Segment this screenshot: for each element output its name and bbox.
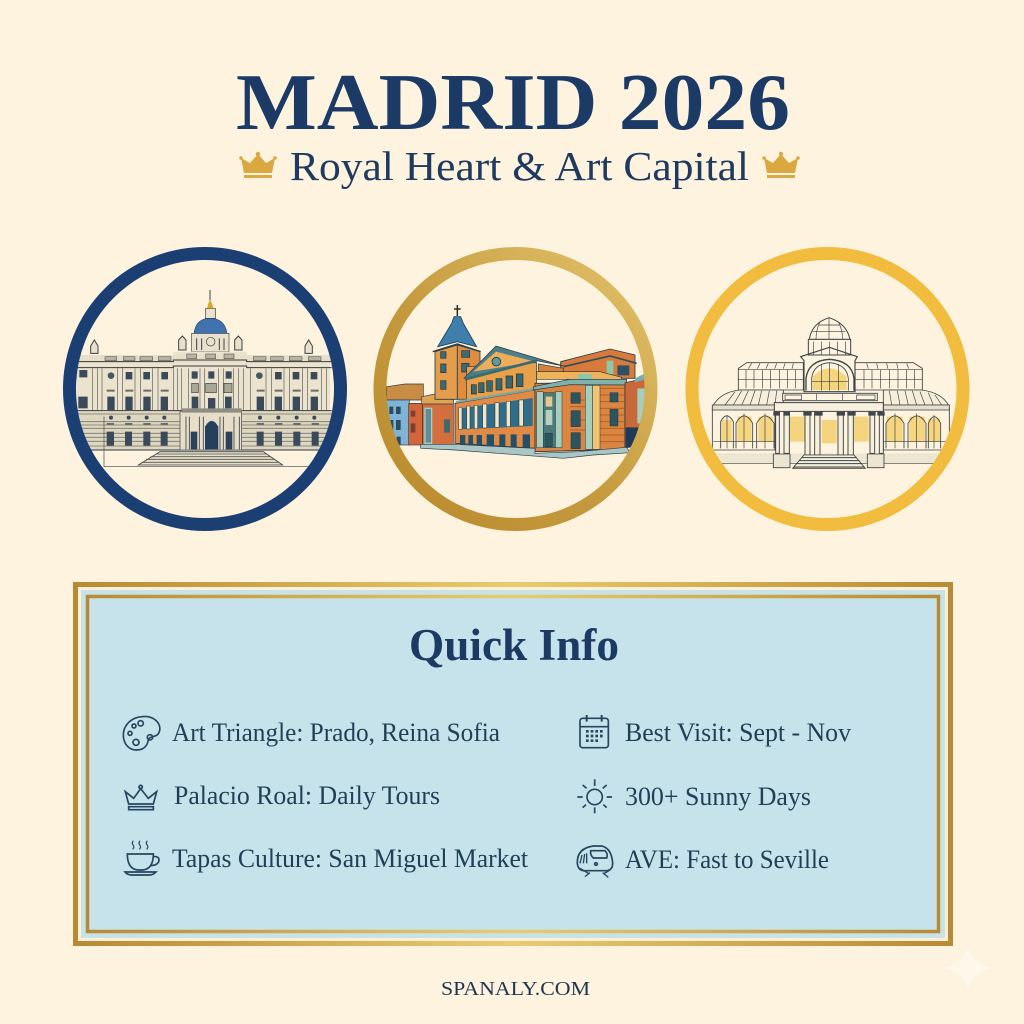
left buildings [387, 384, 423, 400]
label: Palacio Roal: Daily Tours [174, 780, 440, 810]
facade [76, 352, 330, 412]
glass yellow [722, 368, 940, 443]
icon: crown [125, 785, 157, 810]
ring [380, 254, 651, 524]
base [421, 444, 630, 458]
portico [774, 403, 883, 411]
icon: palette [123, 716, 160, 750]
panel heading: Quick Info [409, 620, 619, 670]
ring [70, 254, 340, 524]
label: Tapas Culture: San Miguel Market [172, 843, 529, 873]
title: MADRID 2026 [236, 59, 790, 147]
item: sunny days [577, 779, 811, 813]
item: tapas [125, 841, 529, 875]
centre pavilion [801, 347, 857, 392]
item: art triangle [123, 716, 500, 750]
statues [91, 336, 312, 353]
colonnade wing [455, 390, 535, 448]
icon: left crown [239, 152, 277, 178]
far right [625, 378, 645, 448]
rustication [77, 414, 332, 446]
back block [561, 349, 635, 378]
medallion: museum building [380, 254, 651, 524]
footer: SPANALY.COM [441, 978, 590, 1000]
tower [435, 345, 457, 399]
medallion: royal palace [70, 254, 340, 524]
upper wings [738, 363, 803, 390]
label: Best Visit: Sept - Nov [625, 717, 852, 747]
label: AVE: Fast to Seville [625, 844, 829, 874]
lower walls [712, 408, 949, 450]
item: best visit [580, 715, 852, 748]
front block [535, 383, 625, 452]
label: Art Triangle: Prado, Reina Sofia [172, 717, 500, 747]
dome [809, 318, 850, 339]
gable hall [467, 363, 537, 400]
dome [194, 318, 227, 333]
lower vaults [713, 390, 783, 405]
label: 300+ Sunny Days [625, 781, 811, 811]
icon: sun [577, 779, 612, 813]
windows [78, 370, 319, 446]
icon: train [577, 846, 613, 877]
icon: right crown [762, 152, 800, 178]
icon: calendar [580, 715, 608, 748]
steps [793, 455, 865, 468]
ground band [717, 453, 943, 463]
subtitle text: Royal Heart & Art Capital [290, 143, 749, 189]
drum [192, 333, 229, 352]
subtitle with crowns [239, 143, 800, 189]
panel: quick info [76, 584, 950, 944]
ring [692, 254, 963, 524]
central bay [180, 412, 242, 450]
icon: sparkle watermark [944, 944, 992, 992]
panel frame [76, 584, 950, 944]
item: ave train [577, 844, 829, 877]
steps [138, 452, 283, 465]
item: palacio [125, 780, 440, 810]
pilasters [93, 368, 327, 410]
ground [104, 417, 308, 467]
icon: cup [125, 841, 159, 875]
medallion: glass palace [692, 254, 963, 524]
